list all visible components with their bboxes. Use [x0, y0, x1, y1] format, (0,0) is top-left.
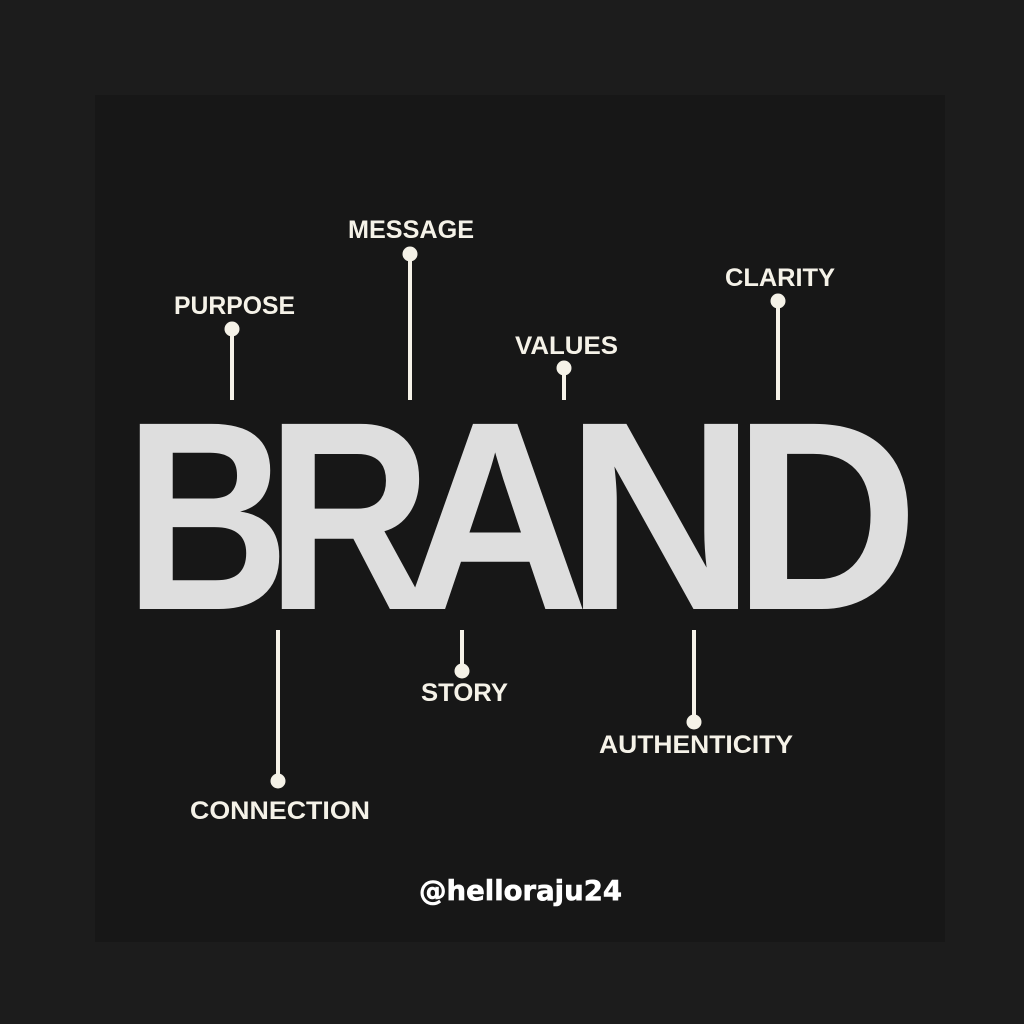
callout: VALUES: VALUES: [515, 332, 618, 360]
callout: CONNECTION: [190, 630, 370, 825]
title: BRAND: N: [565, 367, 756, 667]
callout: CLARITY: CLARITY: [725, 264, 835, 292]
title: BRAND: R: [266, 365, 432, 666]
callout: VALUES: [515, 332, 618, 400]
title: BRAND: [124, 365, 919, 667]
callout: PURPOSE: PURPOSE: [174, 292, 295, 320]
callout: CLARITY: [725, 264, 835, 400]
callout: AUTHENTICITY: AUTHENTICITY: [599, 731, 793, 759]
callout: CONNECTION: CONNECTION: [190, 797, 370, 825]
inner dark panel: [95, 95, 945, 942]
callout: PURPOSE: [174, 292, 295, 400]
title: BRAND: D: [733, 366, 919, 666]
title: BRAND: B: [124, 365, 290, 666]
callout: MESSAGE: [348, 216, 474, 400]
handle: @helloraju24: @helloraju24: [419, 874, 622, 907]
callout: STORY: [421, 630, 508, 707]
callout: MESSAGE: MESSAGE: [348, 216, 474, 244]
callout: STORY: STORY: [421, 679, 508, 707]
title: BRAND: A: [401, 366, 589, 667]
callout: AUTHENTICITY: [599, 630, 793, 759]
